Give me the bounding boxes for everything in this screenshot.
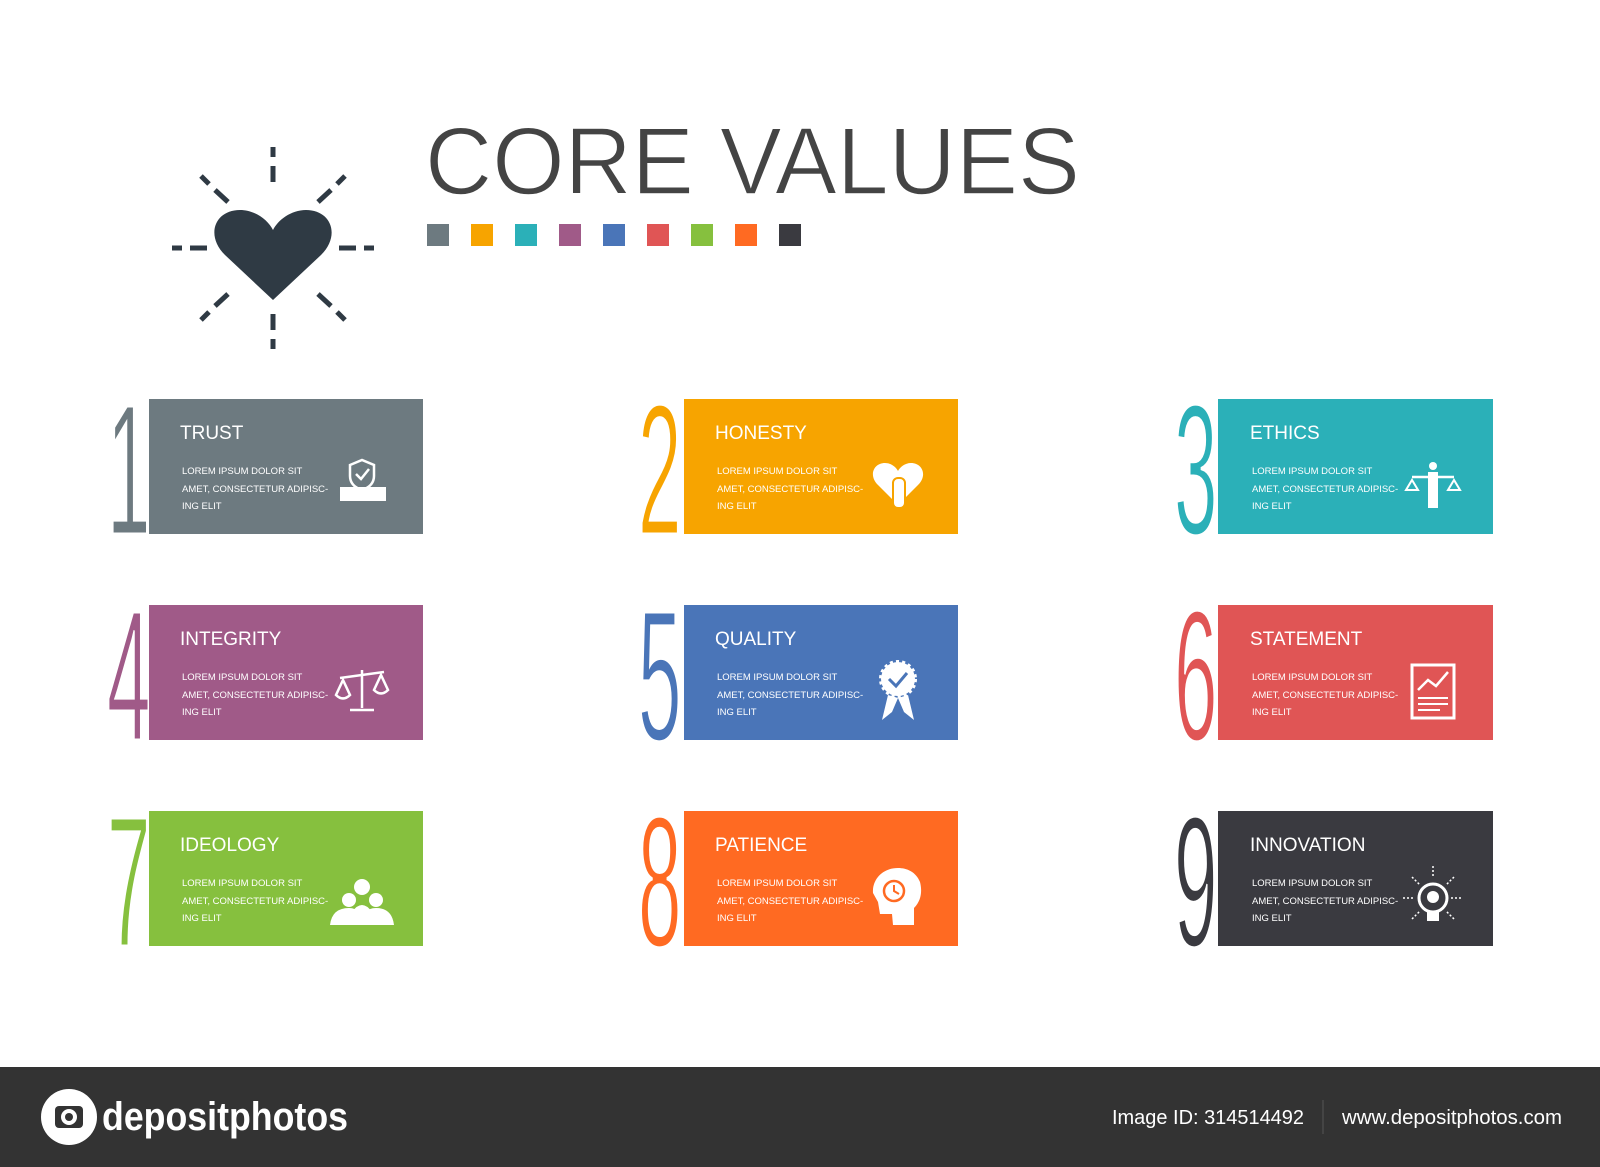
icon: heart with rays — [172, 147, 374, 349]
card 7: ideology: 7 — [107, 779, 150, 986]
card 5: quality: ING ELIT — [717, 707, 757, 718]
card 8: patience: PATIENCE — [715, 835, 807, 856]
card 7: ideology: ING ELIT — [182, 913, 222, 924]
card 9: innovation: ING ELIT — [1252, 913, 1292, 924]
card 3: ethics: ETHICS — [1250, 423, 1320, 444]
card 8: patience: AMET, CONSECTETUR ADIPISC- — [717, 896, 863, 907]
card 7: ideology: LOREM IPSUM DOLOR SIT — [182, 878, 303, 889]
card 6: statement: LOREM IPSUM DOLOR SIT — [1252, 672, 1373, 683]
card 9: innovation: INNOVATION — [1250, 835, 1365, 856]
card 8: patience: ING ELIT — [717, 913, 757, 924]
card 2: honesty — [638, 367, 958, 574]
card 8: patience: LOREM IPSUM DOLOR SIT — [717, 878, 838, 889]
card 3: ethics: LOREM IPSUM DOLOR SIT — [1252, 466, 1373, 477]
card 7: ideology — [107, 779, 423, 986]
card 2: honesty: 2 — [638, 367, 681, 574]
card 2: honesty: AMET, CONSECTETUR ADIPISC- — [717, 484, 863, 495]
card 4: integrity: LOREM IPSUM DOLOR SIT — [182, 672, 303, 683]
card 9: innovation: LOREM IPSUM DOLOR SIT — [1252, 878, 1373, 889]
card 3: ethics: ING ELIT — [1252, 501, 1292, 512]
card 4: integrity: INTEGRITY — [180, 629, 282, 650]
card 7: ideology: AMET, CONSECTETUR ADIPISC- — [182, 896, 328, 907]
card 2: honesty: ING ELIT — [717, 501, 757, 512]
card 4: integrity — [107, 573, 423, 780]
card 1: trust: LOREM IPSUM DOLOR SIT — [182, 466, 303, 477]
card 8: patience — [638, 779, 958, 986]
color legend squares — [427, 224, 801, 246]
card 5: quality: QUALITY — [715, 629, 797, 650]
card 1: trust: ING ELIT — [182, 501, 222, 512]
card 1: trust: TRUST — [180, 423, 244, 444]
card 2: honesty: HONESTY — [715, 423, 807, 444]
card 1: trust: 1 — [107, 367, 150, 574]
card 1: trust: AMET, CONSECTETUR ADIPISC- — [182, 484, 328, 495]
icon: depositphotos logo — [41, 1089, 97, 1145]
card 9: innovation — [1174, 779, 1493, 986]
footer bar: depositphotos — [102, 1095, 348, 1139]
card 5: quality: AMET, CONSECTETUR ADIPISC- — [717, 690, 863, 701]
card 5: quality: LOREM IPSUM DOLOR SIT — [717, 672, 838, 683]
card 6: statement: STATEMENT — [1250, 629, 1363, 650]
card 6: statement: 6 — [1174, 573, 1217, 780]
card 2: honesty: LOREM IPSUM DOLOR SIT — [717, 466, 838, 477]
card 5: quality — [638, 573, 958, 780]
card 3: ethics: 3 — [1174, 367, 1217, 574]
card 3: ethics: AMET, CONSECTETUR ADIPISC- — [1252, 484, 1398, 495]
footer bar — [0, 1067, 1600, 1167]
card 1: trust — [107, 367, 423, 574]
card 4: integrity: AMET, CONSECTETUR ADIPISC- — [182, 690, 328, 701]
footer bar: www.depositphotos.com — [1341, 1107, 1562, 1129]
card 9: innovation: 9 — [1174, 779, 1217, 986]
card 7: ideology: IDEOLOGY — [180, 835, 280, 856]
card 6: statement: AMET, CONSECTETUR ADIPISC- — [1252, 690, 1398, 701]
card 4: integrity: ING ELIT — [182, 707, 222, 718]
card 5: quality: 5 — [638, 573, 681, 780]
footer bar: Image ID: 314514492 — [1112, 1107, 1304, 1129]
card 9: innovation: AMET, CONSECTETUR ADIPISC- — [1252, 896, 1398, 907]
title: CORE VALUES — [425, 108, 1080, 215]
card 6: statement: ING ELIT — [1252, 707, 1292, 718]
card 6: statement — [1174, 573, 1493, 780]
card 4: integrity: 4 — [107, 573, 150, 780]
card 3: ethics — [1174, 367, 1493, 574]
card 8: patience: 8 — [638, 779, 681, 986]
